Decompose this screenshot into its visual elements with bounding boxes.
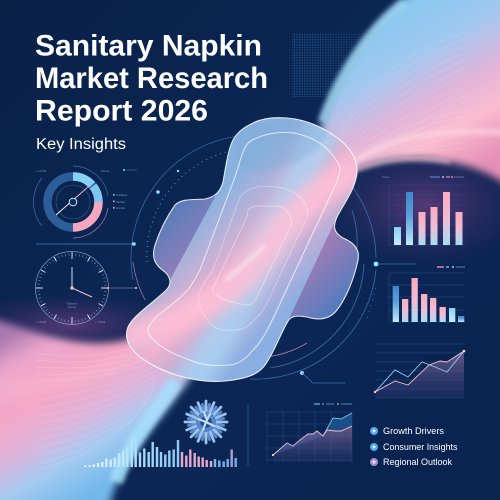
legend item: regional outlook: Regional Outlook bbox=[383, 457, 452, 467]
texture: upper right striations bbox=[338, 32, 465, 159]
texture: upper right pink striations bbox=[358, 111, 465, 161]
divider line with node bbox=[36, 242, 136, 246]
line chart: lower right bbox=[374, 344, 465, 398]
subtitle: Key Insights bbox=[36, 136, 126, 153]
node connector to charts bbox=[374, 262, 416, 266]
legend item: consumer insights: Consumer Insights bbox=[383, 442, 458, 452]
title: Market Research bbox=[35, 62, 268, 95]
bar chart: middle right bbox=[389, 266, 465, 322]
clock widget bbox=[36, 252, 137, 324]
clock widget: Xxxxxx bbox=[68, 305, 77, 309]
dot grid panel bbox=[292, 33, 370, 97]
title bbox=[35, 30, 268, 128]
gauge widget: Xxxxxx bbox=[101, 169, 110, 173]
legend list bbox=[370, 426, 458, 467]
sanitary napkin illustration bbox=[126, 117, 359, 382]
gauge widget: Jetnical bbox=[116, 206, 125, 210]
gauge widget bbox=[33, 166, 137, 238]
purple glows behind ribbons bbox=[0, 143, 500, 357]
spectrum bar chart bbox=[84, 438, 237, 467]
legend item: growth drivers: Growth Drivers bbox=[383, 426, 444, 436]
napkin inner contours bbox=[126, 118, 358, 381]
title: Sanitary Napkin bbox=[35, 30, 262, 62]
gauge widget: Rectals bbox=[116, 200, 125, 204]
gauge widget: Guidance bbox=[116, 193, 128, 197]
clock widget: + 1.00 M bbox=[95, 320, 105, 324]
molecule icon bbox=[185, 401, 227, 443]
bar chart: upper right bbox=[382, 175, 465, 245]
line chart: bottom centre bbox=[248, 403, 352, 466]
ribbon: lower left wave bbox=[0, 318, 193, 500]
clock widget: + 1.00 M bbox=[36, 320, 46, 324]
bar chart: upper right: Xxxxx bbox=[382, 175, 390, 179]
gauge widget: + 2.00 M bbox=[36, 169, 46, 173]
ribbon: upper right wave bbox=[320, 0, 500, 196]
rings around the pad bbox=[131, 136, 376, 383]
title: Report 2026 bbox=[35, 94, 208, 128]
clock widget: Guidance bbox=[66, 302, 78, 306]
texture: lower left striations bbox=[36, 348, 157, 470]
